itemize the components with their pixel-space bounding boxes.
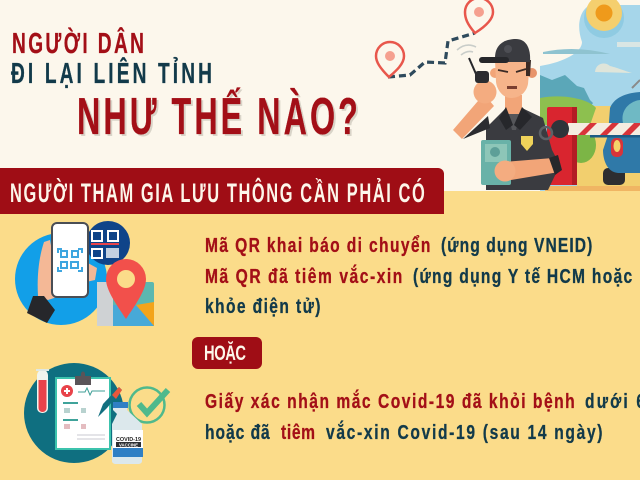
tablet [481,140,511,185]
vaccine bottle [112,402,142,464]
illustration: landscape background [540,0,640,191]
officer lower arm [503,158,559,181]
radio [469,58,476,74]
pen [98,387,122,417]
illustration: boom gate and car [547,80,640,185]
title: NGƯỜI DÂN [12,27,144,60]
officer cap [495,39,530,62]
icon: phone with QR code and map pin [15,221,154,326]
check mark circle [130,388,164,422]
text block: certificate requirements [205,389,640,443]
icon: QR card [91,231,119,258]
icon: medical clipboard and vaccine [24,363,168,464]
icon: map pin [106,259,146,319]
title: ĐI LẠI LIÊN TỈNH [11,56,212,90]
officer head [490,68,500,78]
badge: or: HOẶC [204,340,246,365]
panel: yellow content background [0,191,640,480]
title: NHƯ THẾ NÀO? [79,90,360,148]
test tube [37,370,48,413]
title: NHƯ THẾ NÀO? [77,88,358,146]
text block: QR requirements: khỏe điện tử) [205,295,320,317]
map [97,282,113,326]
text block: certificate requirements: tiêm [281,421,315,443]
illustration: route map pins [376,0,493,77]
text block: QR requirements: Mã QR đã tiêm vắc-xin [205,264,402,287]
text block: certificate requirements: Giấy xác nhận mắc Covid-19 đã khỏi bệnh [205,389,575,412]
officer torso [486,108,560,190]
icon: medical clipboard and vaccine: COVID-19 [116,437,141,443]
text block: certificate requirements: vắc-xin Covid-19 (sau 14 ngày) [326,420,603,443]
text block: QR requirements [205,234,632,317]
hand [38,240,60,300]
text block: QR requirements: Mã QR khai báo di chuyển [205,234,430,256]
section banner [0,168,444,214]
text block: QR requirements: (ứng dụng Y tế HCM hoặc [413,265,632,287]
clipboard [56,378,110,449]
text block: QR requirements: (ứng dụng VNEID) [441,234,592,256]
phone [52,223,88,297]
badge: or [192,337,262,369]
officer raised arm [453,94,494,139]
section banner: NGƯỜI THAM GIA LƯU THÔNG CẦN PHẢI CÓ [10,178,425,208]
title [11,27,360,148]
illustration: security officer with radio [453,39,562,190]
text block: certificate requirements: hoặc đã [205,421,271,443]
icon: medical clipboard and vaccine: VACCINE [119,442,138,448]
